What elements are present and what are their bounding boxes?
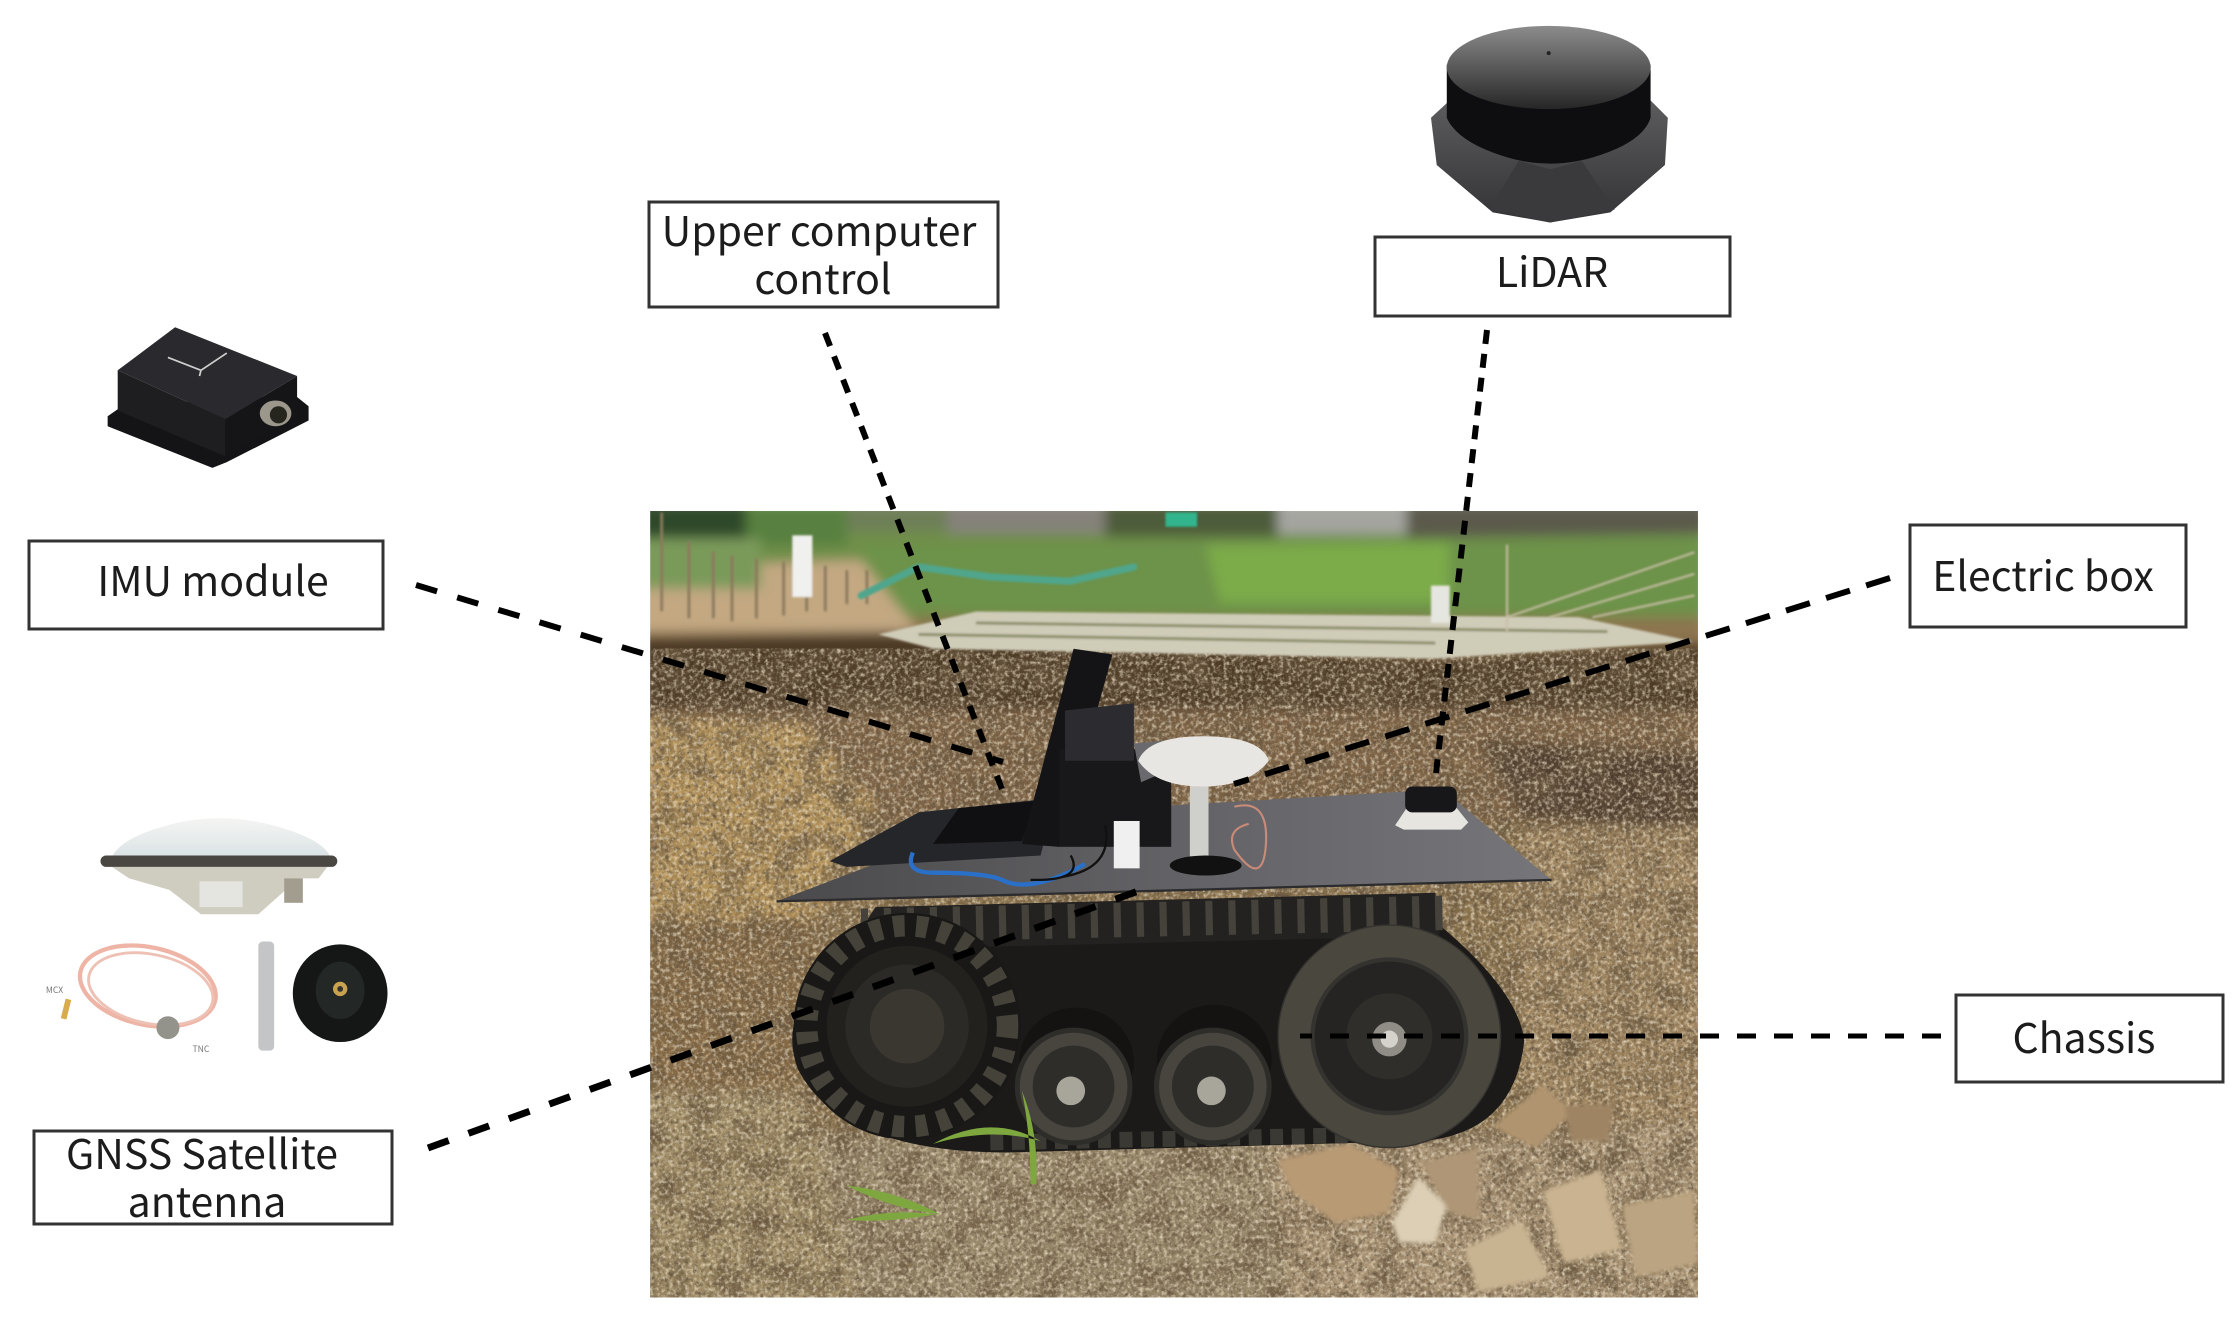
lidar on robot — [1395, 787, 1468, 830]
icon: LiDAR sensor — [1431, 26, 1668, 222]
rocks — [1277, 1084, 1698, 1292]
grass foreground — [847, 1091, 1041, 1221]
soil and straw texture — [650, 649, 1698, 1298]
label: GNSS Satellite antenna: antenna — [128, 1169, 286, 1229]
label: Chassis — [1956, 995, 2223, 1082]
middle road wheels — [1015, 1028, 1272, 1146]
label: Electric box: Electric box — [1932, 543, 2154, 603]
label: GNSS Satellite antenna — [34, 1121, 392, 1229]
steel top plate — [776, 789, 1552, 901]
laptop screen — [1022, 649, 1112, 847]
label: LiDAR: LiDAR — [1496, 239, 1608, 299]
label: Upper computer control — [649, 198, 998, 307]
lower tread — [990, 1134, 1421, 1142]
robot: tracks and wheels — [776, 649, 1552, 1153]
dashed leader: IMU module — [416, 585, 1003, 762]
blue network cable — [911, 853, 1085, 885]
label: IMU module: IMU module — [97, 548, 329, 608]
dashed leader: upper computer control — [825, 333, 1005, 797]
coaxial cable — [46, 934, 223, 1055]
label: Chassis: Chassis — [2013, 1005, 2155, 1065]
left sprocket wheel — [794, 913, 1020, 1140]
dashed leader: chassis — [1300, 1034, 1941, 1038]
magnetic base — [293, 944, 388, 1042]
antenna puck — [100, 818, 337, 914]
photo: tracked robot in the field — [639, 502, 1708, 1306]
label: IMU module — [29, 541, 383, 629]
icon: GNSS antenna kit — [46, 818, 388, 1055]
coaxial cable: MCX — [46, 984, 63, 996]
electric box — [1059, 703, 1172, 868]
upper tread — [868, 892, 1436, 933]
label: Upper computer control: control — [754, 246, 892, 306]
dashed leader: electric box — [1234, 578, 1890, 784]
field background — [639, 502, 1708, 1306]
coaxial cable: TNC — [193, 1043, 210, 1055]
label: LiDAR — [1375, 237, 1730, 316]
fence posts and netting — [662, 512, 1694, 632]
icon: IMU module — [108, 327, 309, 468]
steel rod — [258, 942, 274, 1051]
label: Electric box — [1910, 525, 2186, 627]
antenna on robot — [1138, 736, 1269, 876]
laptop base — [830, 798, 1055, 867]
dashed leader: LiDAR — [1435, 330, 1487, 782]
crawler track — [792, 921, 1524, 1153]
label: Upper computer control: Upper computer — [662, 198, 976, 258]
label: GNSS Satellite antenna: GNSS Satellite — [66, 1121, 338, 1181]
right drive wheel — [1277, 924, 1501, 1148]
dashed leader: GNSS antenna — [428, 885, 1155, 1148]
white film rows — [878, 611, 1694, 659]
